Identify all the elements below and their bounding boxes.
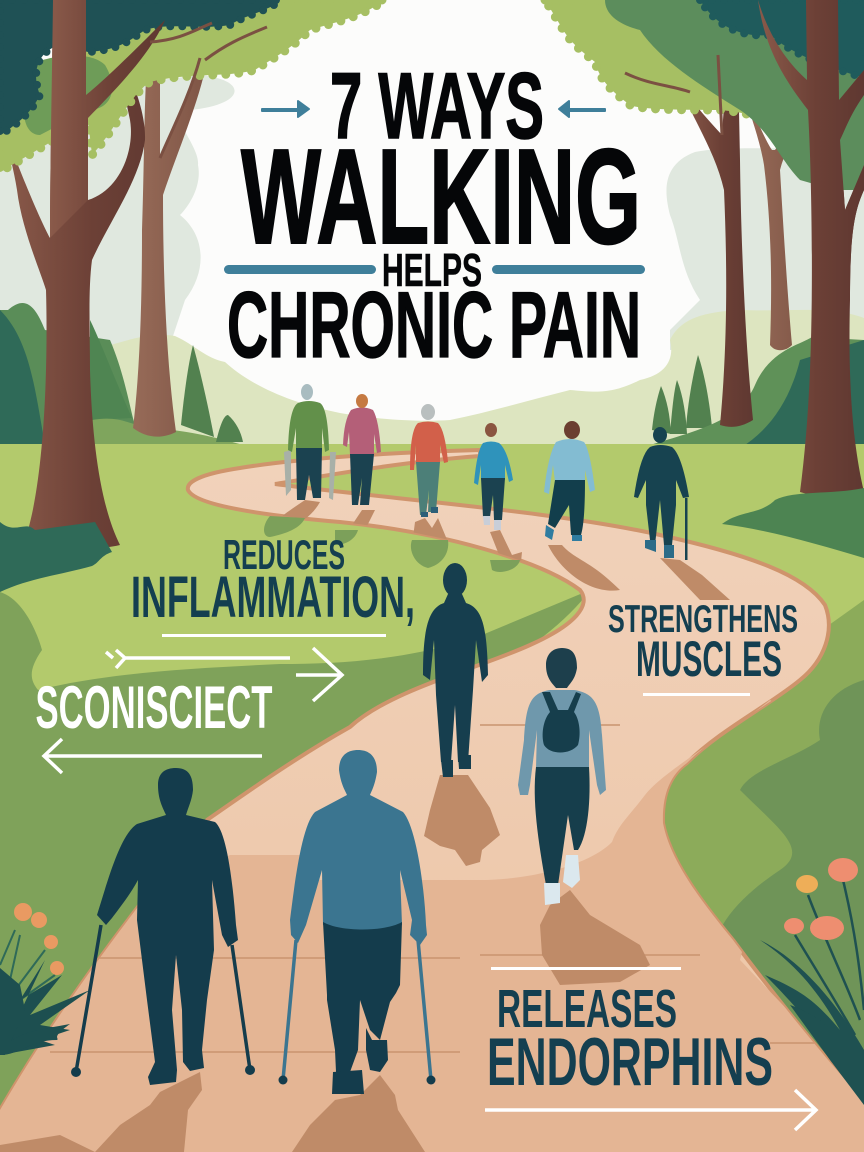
winding path [0,450,864,1152]
distant hills [0,310,864,460]
darker path section and shadows [0,500,864,1152]
flowers left [0,903,90,1055]
flowers right [760,858,864,1105]
bushes right [650,337,864,450]
far walker: dark silhouette with cane [634,427,689,560]
label: releases endorphins [487,967,773,1100]
title: 7 WAYS [330,53,544,158]
pale mist left [0,75,235,345]
ground bush right [722,488,864,558]
darker grass areas [0,590,864,1120]
far walker: blue sweater [474,423,513,530]
right tree trunks [680,0,864,497]
label: releases endorphins: RELEASES [497,979,677,1039]
arrow under endorphins [485,1090,816,1130]
label: reduces inflammation: REDUCES [223,531,345,578]
pale mist right [666,148,864,350]
title arrow left [262,101,309,117]
foreground left trunk over foliage [50,0,165,238]
background sky [0,0,864,470]
title rule left [224,265,376,274]
title: HELPS [382,244,482,296]
ground bush left [0,522,112,592]
far walker: light blue shirt [544,421,595,541]
foreground walker: blue shirt with canes [278,750,436,1094]
label: sconisiect: SCONISCIECT [36,674,272,741]
left tree trunks [5,0,207,549]
title: WALKING [241,121,641,272]
foreground right trunk over foliage [758,0,864,300]
label: reduces inflammation: INFLAMMATION, [131,565,415,630]
bushes left [0,303,247,452]
far walker: orange sweater [410,404,448,517]
distant cypress trees [181,345,712,442]
title [227,53,641,377]
far walker: pink shirt [343,394,381,505]
far walker: green sweater with walker frame [284,384,336,500]
foreground walker: dark silhouette with canes [71,768,255,1085]
grass field [0,444,864,1152]
title rule right [492,265,645,274]
tree foliage [0,0,864,190]
arrow pointing left [44,739,262,773]
title arrow right [559,101,605,117]
arrow pointing right [106,648,342,701]
branches over foliage [150,23,722,158]
grass shadows [264,516,520,572]
label: reduces inflammation [131,531,415,637]
label: strengthens muscles [608,598,798,696]
middle walker: dark silhouette [423,563,488,777]
walker with backpack [518,648,606,905]
